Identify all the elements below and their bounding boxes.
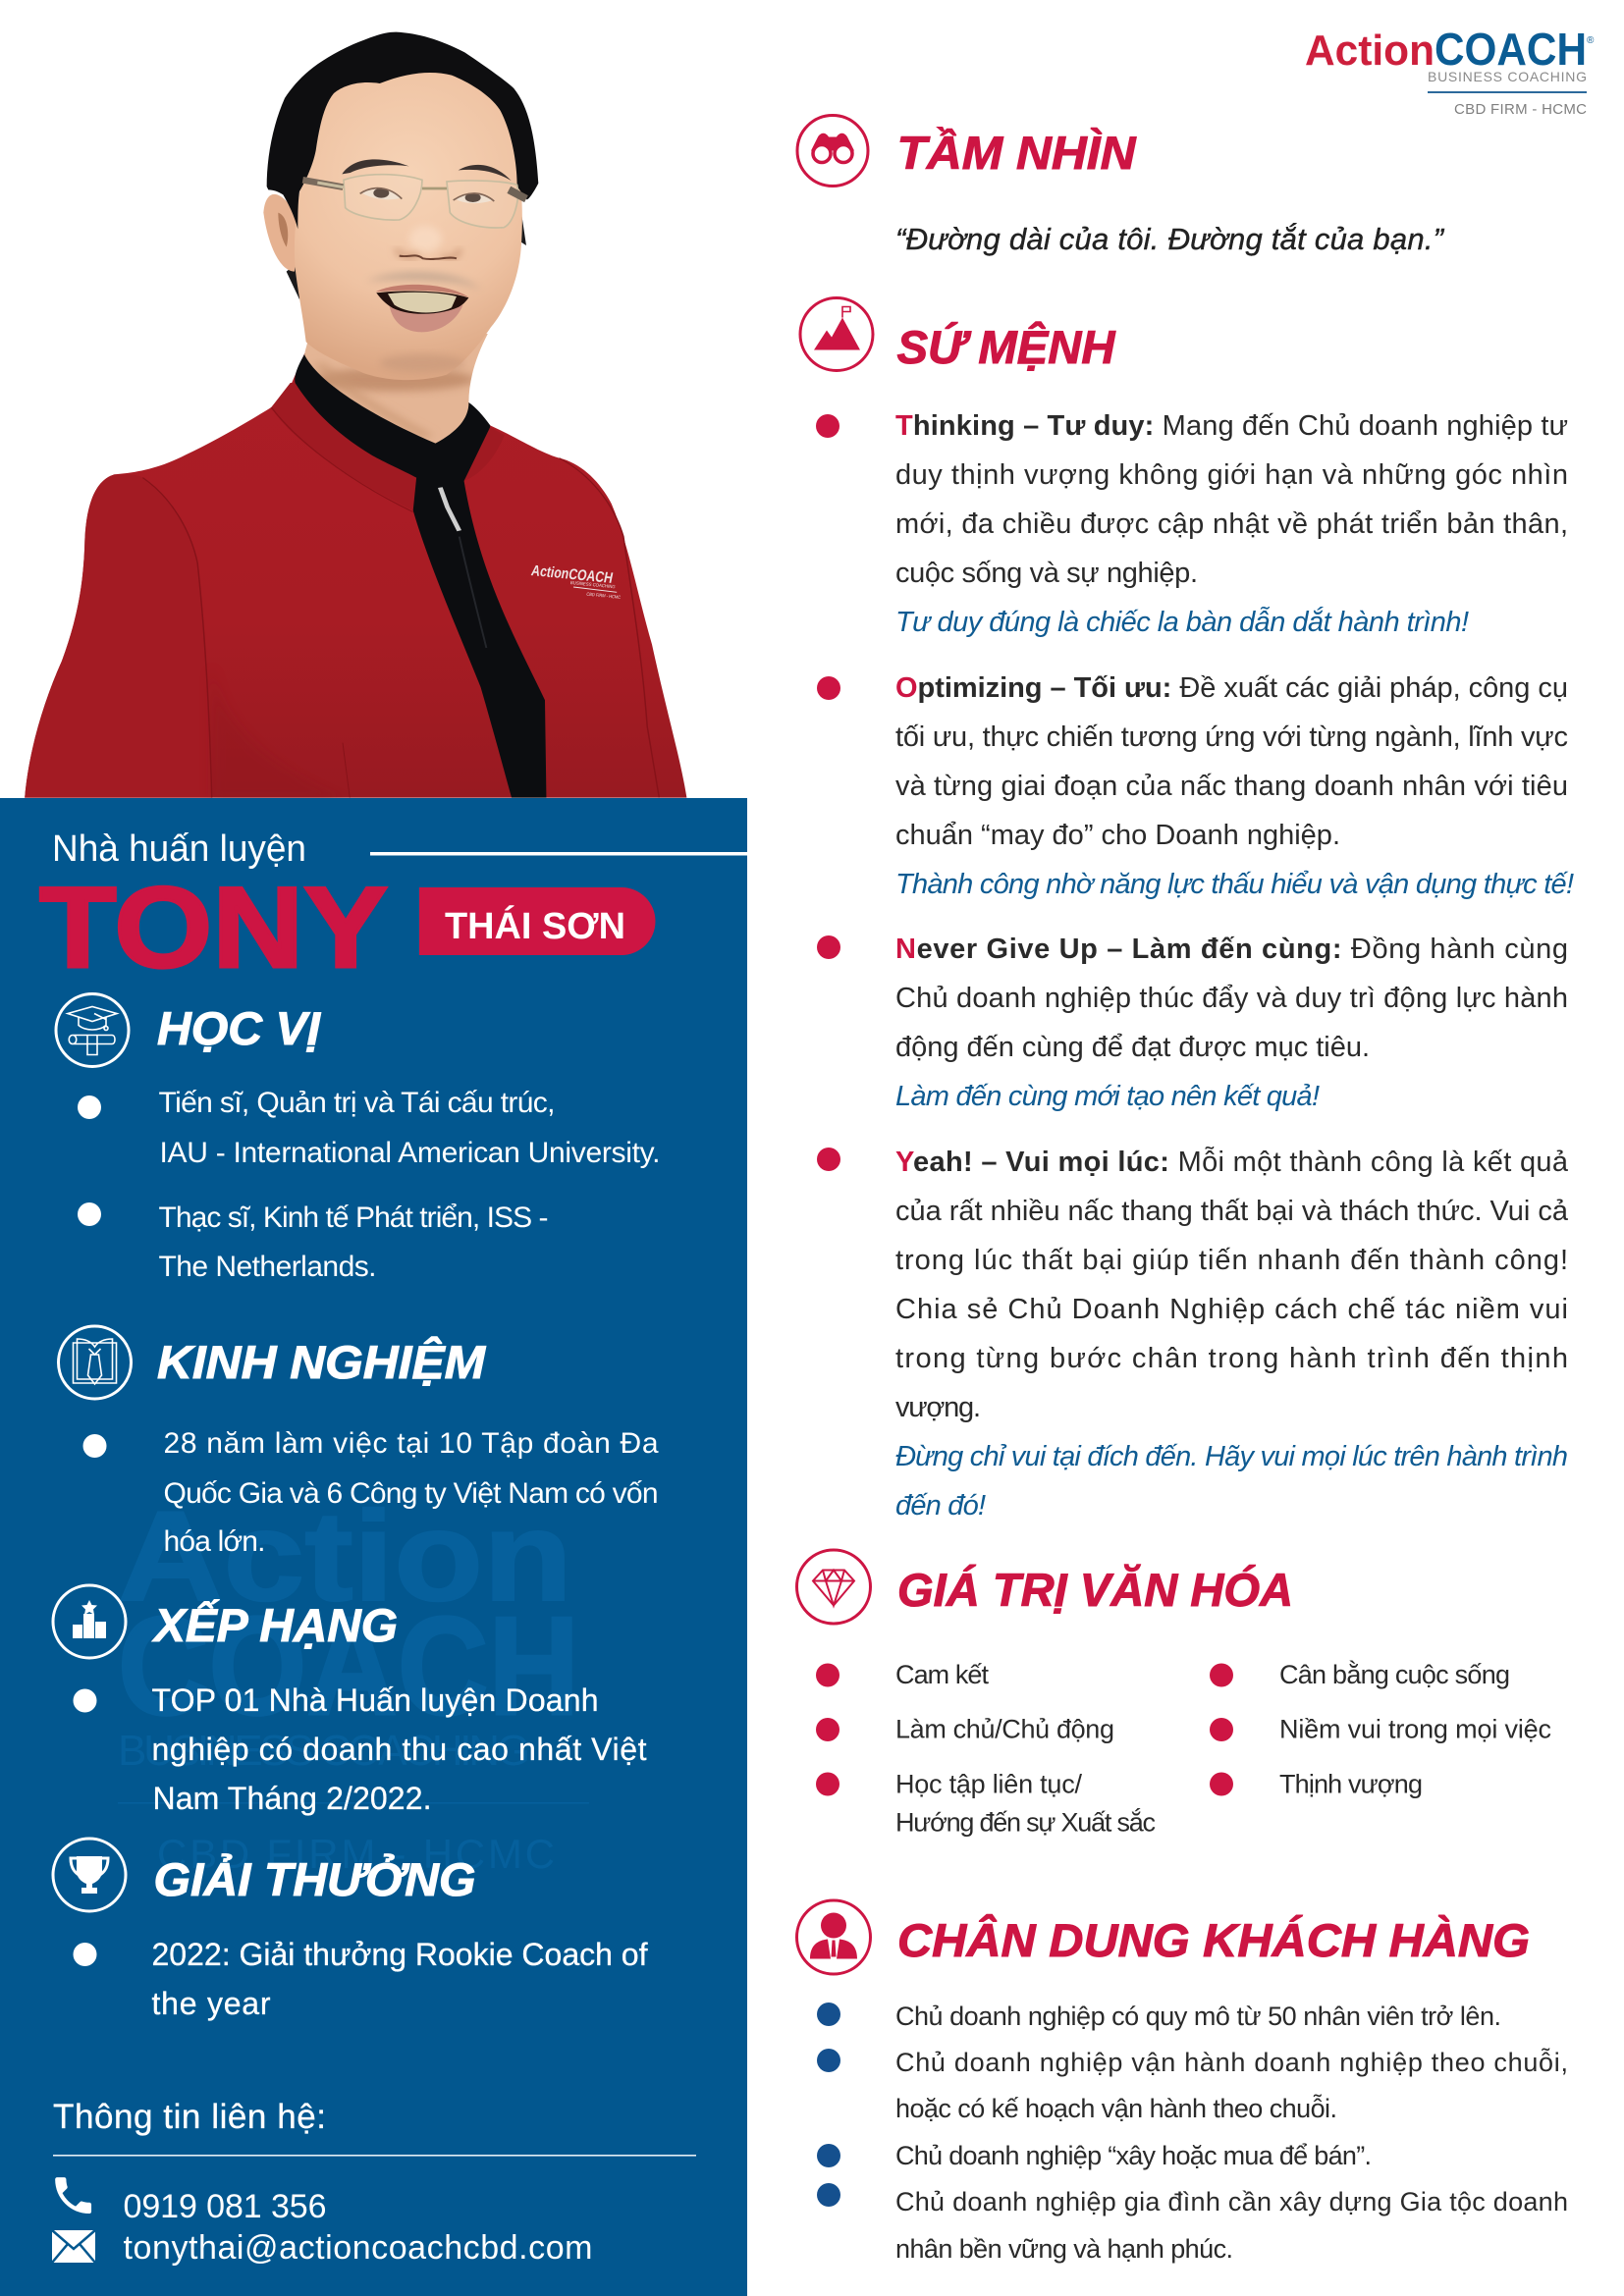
logo: ActionCOACH: ® bbox=[1587, 35, 1595, 46]
values list: Học tập liên tục/ bbox=[895, 1769, 1082, 1798]
bullet list: 2022: Giải thưởng Rookie Coach of bbox=[151, 1937, 648, 1972]
item: Yeah: Đừng chỉ vui tại đích đến. Hãy vui mọi lúc trên hành trình bbox=[895, 1441, 1568, 1472]
item: Optimizing: và từng giai đoạn của nấc thang doanh nhân với tiêu bbox=[895, 771, 1568, 802]
icon: binoculars bbox=[797, 116, 868, 187]
section: SỨ MỆNH bbox=[800, 298, 1116, 373]
item: Yeah bbox=[817, 1146, 1569, 1522]
name: TONY: TONY bbox=[39, 863, 388, 991]
item: Yeah: đến đó! bbox=[895, 1490, 986, 1522]
portrait photo bbox=[25, 32, 686, 798]
customer list: Chủ doanh nghiệp gia đình cần xây dựng Gia tộc doanh bbox=[895, 2187, 1568, 2216]
watermark logo: BUSINESS COACHING bbox=[118, 1727, 530, 1775]
values list: Thịnh vượng bbox=[1279, 1769, 1423, 1798]
heading: GIÁ TRỊ VĂN HÓA bbox=[897, 1564, 1293, 1616]
item: Never Give Up: động đến cùng để đạt được mục tiêu. bbox=[895, 1032, 1370, 1063]
item: Yeah: trong lúc thất bại giúp tiến nhanh đến thành công! bbox=[895, 1245, 1568, 1276]
customer list: Chủ doanh nghiệp vận hành doanh nghiệp theo chuỗi, bbox=[895, 2047, 1568, 2077]
icon: graduation cap and scroll bbox=[56, 993, 129, 1066]
name pill: THÁI SƠN bbox=[419, 887, 656, 955]
panel: coach profile bbox=[0, 798, 747, 2296]
phone number: 0919 081 356 bbox=[124, 2188, 326, 2225]
bullet list: IAU - International American University. bbox=[159, 1137, 660, 1169]
customer list: Chủ doanh nghiệp có quy mô từ 50 nhân viên trở lên. bbox=[895, 2002, 1501, 2031]
bullet list bbox=[73, 1937, 648, 2021]
heading: GIẢI THƯỞNG bbox=[153, 1853, 475, 1905]
icon: person bbox=[797, 1900, 870, 1974]
item: Optimizing: chuẩn “may đo” cho Doanh nghiệp. bbox=[895, 820, 1340, 851]
item: Thinking: duy thịnh vượng không giới hạn và những góc nhìn bbox=[895, 459, 1568, 491]
logo: ActionCOACH: CBD FIRM - HCMC bbox=[1454, 101, 1587, 118]
item: Optimizing: Optimizing – Tối ưu: Đề xuất các giải pháp, công cụ bbox=[895, 672, 1568, 704]
bullet list: the year bbox=[151, 1986, 271, 2021]
customer list: Chủ doanh nghiệp “xây hoặc mua để bán”. bbox=[895, 2141, 1372, 2170]
bullet list: hóa lớn. bbox=[163, 1525, 265, 1558]
section: GIẢI THƯỞNG bbox=[53, 1839, 648, 2021]
bullet list: Thạc sĩ, Kinh tế Phát triển, ISS - bbox=[159, 1201, 548, 1234]
bullet list: The Netherlands. bbox=[159, 1251, 377, 1283]
item: Optimizing: Thành công nhờ năng lực thấu hiểu và vận dụng thực tế! bbox=[895, 869, 1574, 900]
heading: Thông tin liên hệ: bbox=[53, 2098, 326, 2136]
item: Thinking: cuộc sống và sự nghiệp. bbox=[895, 558, 1198, 589]
heading: TẦM NHÌN bbox=[897, 127, 1137, 179]
item: Never Give Up: Làm đến cùng mới tạo nên kết quả! bbox=[895, 1081, 1320, 1112]
customer list bbox=[817, 2002, 1568, 2264]
bullet list bbox=[73, 1682, 647, 1816]
item: Yeah: vượng. bbox=[895, 1392, 981, 1423]
item: Never Give Up bbox=[817, 934, 1568, 1112]
section: TẦM NHÌN bbox=[797, 116, 1445, 256]
logo: ActionCOACH: Action bbox=[1305, 27, 1435, 75]
values list: Niềm vui trong mọi việc bbox=[1279, 1714, 1551, 1743]
logo: ActionCOACH bbox=[1305, 24, 1595, 118]
item: Thinking: Thinking – Tư duy: Mang đến Chủ doanh nghiệp tư bbox=[895, 410, 1568, 442]
quote: “Đường dài của tôi. Đường tắt của bạn.” bbox=[895, 222, 1445, 256]
item: Never Give Up: Never Give Up – Làm đến cùng: Đồng hành cùng bbox=[895, 934, 1568, 965]
icon: mail bbox=[52, 2230, 95, 2263]
customer list: hoặc có kế hoạch vận hành theo chuỗi. bbox=[895, 2093, 1337, 2123]
bullet list: nghiệp có doanh thu cao nhất Việt bbox=[151, 1732, 647, 1767]
values list bbox=[816, 1659, 1551, 1838]
bullet list: Tiến sĩ, Quản trị và Tái cấu trúc, bbox=[159, 1087, 556, 1119]
heading: SỨ MỆNH bbox=[897, 321, 1116, 373]
item: Thinking bbox=[816, 410, 1568, 638]
item: Yeah: Yeah! – Vui mọi lúc: Mỗi một thành công là kết quả bbox=[895, 1146, 1569, 1178]
item: Optimizing: tối ưu, thực chiến tương ứng với từng ngành, lĩnh vực bbox=[895, 721, 1568, 753]
subtitle bbox=[52, 828, 747, 870]
heading: CHÂN DUNG KHÁCH HÀNG bbox=[897, 1914, 1530, 1966]
bullet list bbox=[78, 1087, 660, 1283]
jacket and shirt: BUSINESS COACHING bbox=[569, 581, 616, 590]
email: tonythai@actioncoachcbd.com bbox=[124, 2229, 593, 2267]
head bbox=[263, 32, 538, 380]
values list: Hướng đến sự Xuất sắc bbox=[895, 1806, 1156, 1838]
icon: phone bbox=[55, 2177, 91, 2214]
section: KINH NGHIỆM bbox=[59, 1326, 659, 1558]
icon: trophy bbox=[53, 1839, 126, 1911]
item: Thinking: Tư duy đúng là chiếc la bàn dẫn dắt hành trình! bbox=[895, 606, 1469, 638]
item: Yeah: trong từng bước chân trong hành trình đến thịnh bbox=[895, 1343, 1568, 1374]
bullet list: TOP 01 Nhà Huấn luyện Doanh bbox=[151, 1682, 599, 1718]
heading: XẾP HẠNG bbox=[151, 1599, 398, 1651]
icon: mountain flag bbox=[800, 298, 873, 371]
section: CHÂN DUNG KHÁCH HÀNG bbox=[797, 1900, 1568, 2264]
customer list: nhân bền vững và hạnh phúc. bbox=[895, 2234, 1233, 2264]
item: Thinking: mới, đa chiều được cập nhật về phát triển bản thân, bbox=[895, 508, 1568, 540]
section: XẾP HẠNG bbox=[53, 1585, 647, 1816]
watermark logo bbox=[118, 1484, 589, 1877]
item: Never Give Up: Chủ doanh nghiệp thúc đẩy và duy trì động lực hành bbox=[895, 983, 1568, 1014]
item: Optimizing bbox=[817, 672, 1574, 900]
watermark logo: CBD FIRM - HCMC bbox=[157, 1831, 555, 1877]
values list: Cân bằng cuộc sống bbox=[1279, 1659, 1510, 1689]
icon: diamond bbox=[797, 1550, 870, 1624]
jacket and shirt bbox=[25, 334, 686, 798]
name pill: THÁI SƠN: THÁI SƠN bbox=[445, 904, 625, 947]
bullet list bbox=[82, 1427, 659, 1558]
heading: HỌC VỊ bbox=[157, 1002, 321, 1054]
item: Yeah: của rất nhiều nấc thang thất bại và thách thức. Vui cả bbox=[895, 1196, 1569, 1227]
bullet list: Nam Tháng 2/2022. bbox=[153, 1781, 432, 1816]
watermark logo: COACH bbox=[118, 1588, 579, 1744]
logo: ActionCOACH: BUSINESS COACHING bbox=[1428, 69, 1587, 84]
bullet list: Quốc Gia và 6 Công ty Việt Nam có vốn bbox=[163, 1477, 658, 1510]
contact info bbox=[52, 2098, 696, 2267]
bullet list: 28 năm làm việc tại 10 Tập đoàn Đa bbox=[163, 1427, 659, 1460]
values list: Làm chủ/Chủ động bbox=[895, 1714, 1114, 1743]
logo: ActionCOACH: COACH bbox=[1435, 24, 1587, 75]
section: GIÁ TRỊ VĂN HÓA bbox=[797, 1550, 1551, 1838]
item: Yeah: Chia sẻ Chủ Doanh Nghiệp cách chế tác niềm vui bbox=[895, 1294, 1568, 1325]
jacket and shirt: ActionCOACH bbox=[530, 562, 615, 587]
values list: Cam kết bbox=[895, 1660, 989, 1689]
jacket and shirt: CBD FIRM - HCMC bbox=[586, 592, 621, 601]
watermark logo: Action bbox=[118, 1484, 572, 1628]
heading: KINH NGHIỆM bbox=[157, 1336, 486, 1388]
icon: podium bbox=[53, 1585, 126, 1658]
section: HỌC VỊ bbox=[56, 993, 660, 1283]
icon: book and tie bbox=[59, 1326, 132, 1399]
subtitle: Nhà huấn luyện bbox=[52, 828, 306, 870]
